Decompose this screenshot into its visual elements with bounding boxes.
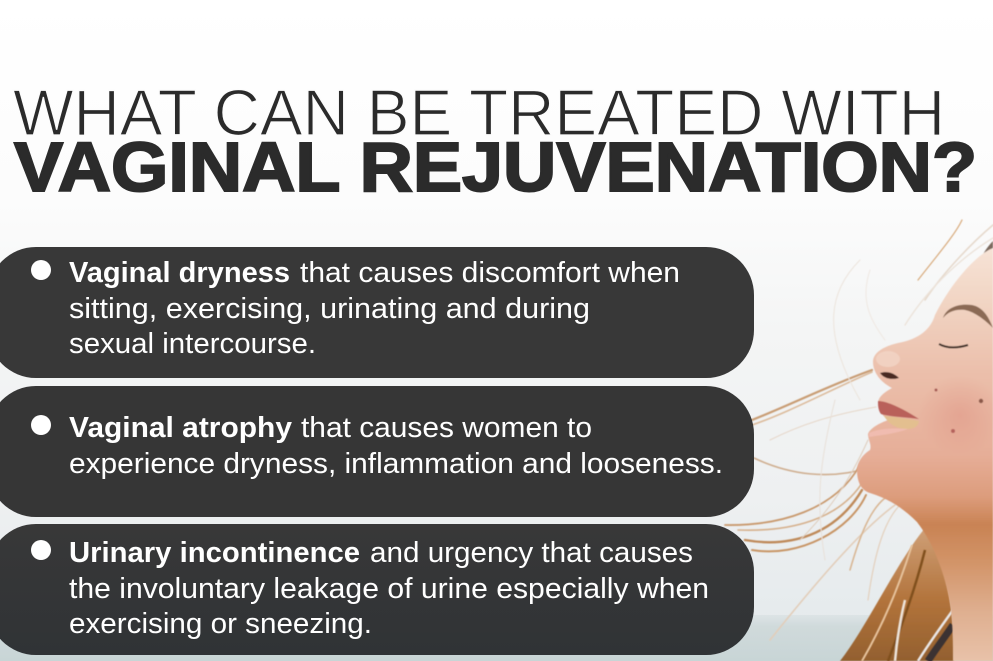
text block: Vaginal dryness — [69, 257, 290, 289]
panel: vaginal dryness — [0, 247, 754, 378]
nostril — [880, 372, 899, 379]
eyebrow — [943, 305, 993, 328]
text block — [69, 537, 709, 640]
mouth upper lip — [878, 401, 919, 419]
text block: and urgency that causes — [370, 537, 693, 569]
bullet — [31, 415, 51, 435]
text block: Urinary incontinence — [69, 537, 360, 569]
text block: that causes women to — [301, 412, 592, 444]
text block: Vaginal atrophy — [69, 412, 292, 444]
hair falling behind neck — [840, 528, 954, 661]
text block: exercising or sneezing. — [69, 608, 372, 640]
face and neck shape — [857, 248, 993, 661]
title line 2: VAGINAL REJUVENATION? — [14, 128, 977, 206]
cheek blush — [918, 375, 993, 455]
nose tip highlight — [876, 351, 900, 367]
text block — [69, 412, 723, 480]
text block — [69, 257, 680, 360]
bullet — [31, 540, 51, 560]
closed eye lashes — [939, 344, 968, 348]
text block: sexual intercourse. — [69, 328, 316, 360]
hair strands blowing in the wind — [725, 220, 993, 640]
title line 1: WHAT CAN BE TREATED WITH — [13, 76, 945, 149]
text block: that causes discomfort when — [300, 257, 680, 289]
text block: sitting, exercising, urinating and during — [69, 293, 590, 325]
panel: vaginal atrophy — [0, 386, 754, 517]
text block: the involuntary leakage of urine especially when — [69, 573, 709, 605]
text block: experience dryness, inflammation and looseness. — [69, 448, 723, 480]
bullet — [31, 260, 51, 280]
teeth — [884, 416, 919, 429]
panel: urinary incontinence — [0, 524, 754, 655]
lower lip — [869, 428, 908, 437]
hair highlights — [862, 545, 953, 661]
dark hairline at top — [981, 241, 993, 258]
moles — [979, 399, 983, 403]
background sea band — [0, 615, 993, 661]
title — [13, 76, 977, 206]
woman's face in profile — [857, 241, 993, 661]
